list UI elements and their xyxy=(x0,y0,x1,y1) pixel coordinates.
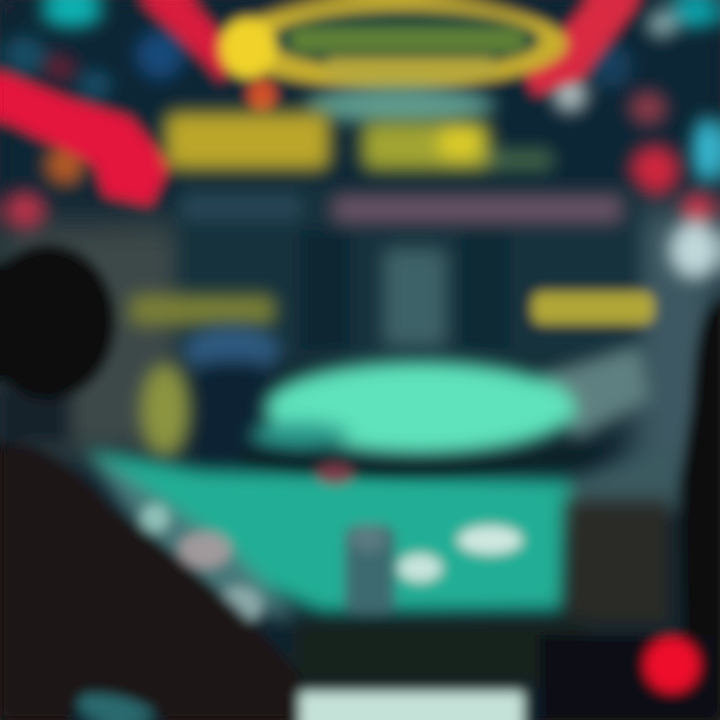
central display board xyxy=(180,185,640,355)
background wall xyxy=(0,0,720,480)
foreground body silhouette xyxy=(0,440,300,720)
table rail xyxy=(240,452,590,470)
yellow banner lettering xyxy=(165,112,553,170)
right side dealer box xyxy=(565,500,670,625)
upper bright poker table xyxy=(250,345,650,454)
bottom teal glow xyxy=(78,688,162,720)
lower green poker table xyxy=(85,440,680,620)
sign glow xyxy=(305,87,495,123)
bright bottom strip xyxy=(298,692,523,720)
red light beams xyxy=(0,0,640,205)
right person silhouette xyxy=(680,295,720,720)
oval tournament sign xyxy=(220,0,567,88)
yellow-green seated figure xyxy=(141,364,189,456)
foreground head silhouette xyxy=(0,244,116,400)
cards and chips on table xyxy=(141,464,522,623)
bottom right dark corner xyxy=(540,635,720,720)
right scoreboard yellow text xyxy=(532,292,654,324)
red record button xyxy=(645,638,699,692)
front table edge xyxy=(295,622,585,684)
decorative stage lights xyxy=(5,0,720,278)
neck shading xyxy=(0,385,70,445)
left scoreboard yellow text xyxy=(130,295,275,325)
seated player in blue xyxy=(184,326,280,465)
